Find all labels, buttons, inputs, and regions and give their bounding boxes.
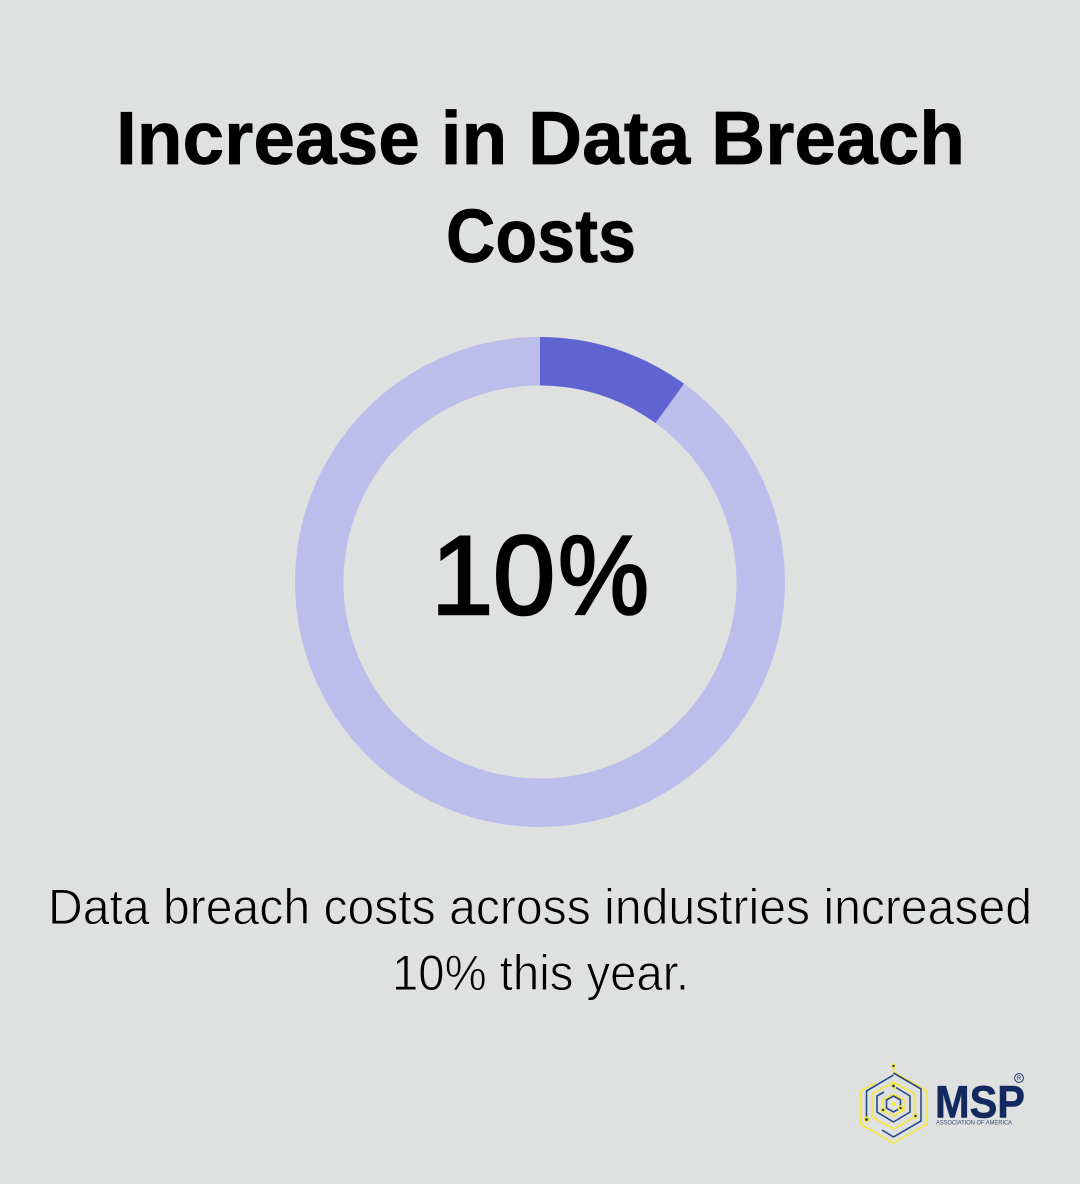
logo icon: hexagon circuit bbox=[860, 1064, 927, 1143]
donut chart bbox=[319, 337, 761, 803]
title: Increase in Data Breach bbox=[116, 96, 965, 180]
donut segment: 10% bbox=[540, 337, 684, 423]
logo wordmark: MSP bbox=[935, 1076, 1025, 1128]
description text: 10% this year. bbox=[392, 945, 689, 1001]
logo registered mark: R bbox=[1017, 1076, 1022, 1082]
center value: 0 bbox=[493, 513, 555, 638]
logo tagline: ASSOCIATION OF AMERICA bbox=[936, 1121, 1012, 1127]
description text: Data breach costs across industries increased bbox=[48, 879, 1032, 935]
center value: 1 bbox=[431, 513, 493, 638]
logo: MSP Association of America bbox=[860, 1064, 1025, 1143]
center value bbox=[431, 513, 649, 638]
center value: % bbox=[558, 513, 649, 638]
title: Costs bbox=[446, 194, 636, 278]
logo registered mark bbox=[1015, 1074, 1023, 1082]
description text bbox=[48, 879, 1032, 1001]
title bbox=[116, 96, 965, 278]
